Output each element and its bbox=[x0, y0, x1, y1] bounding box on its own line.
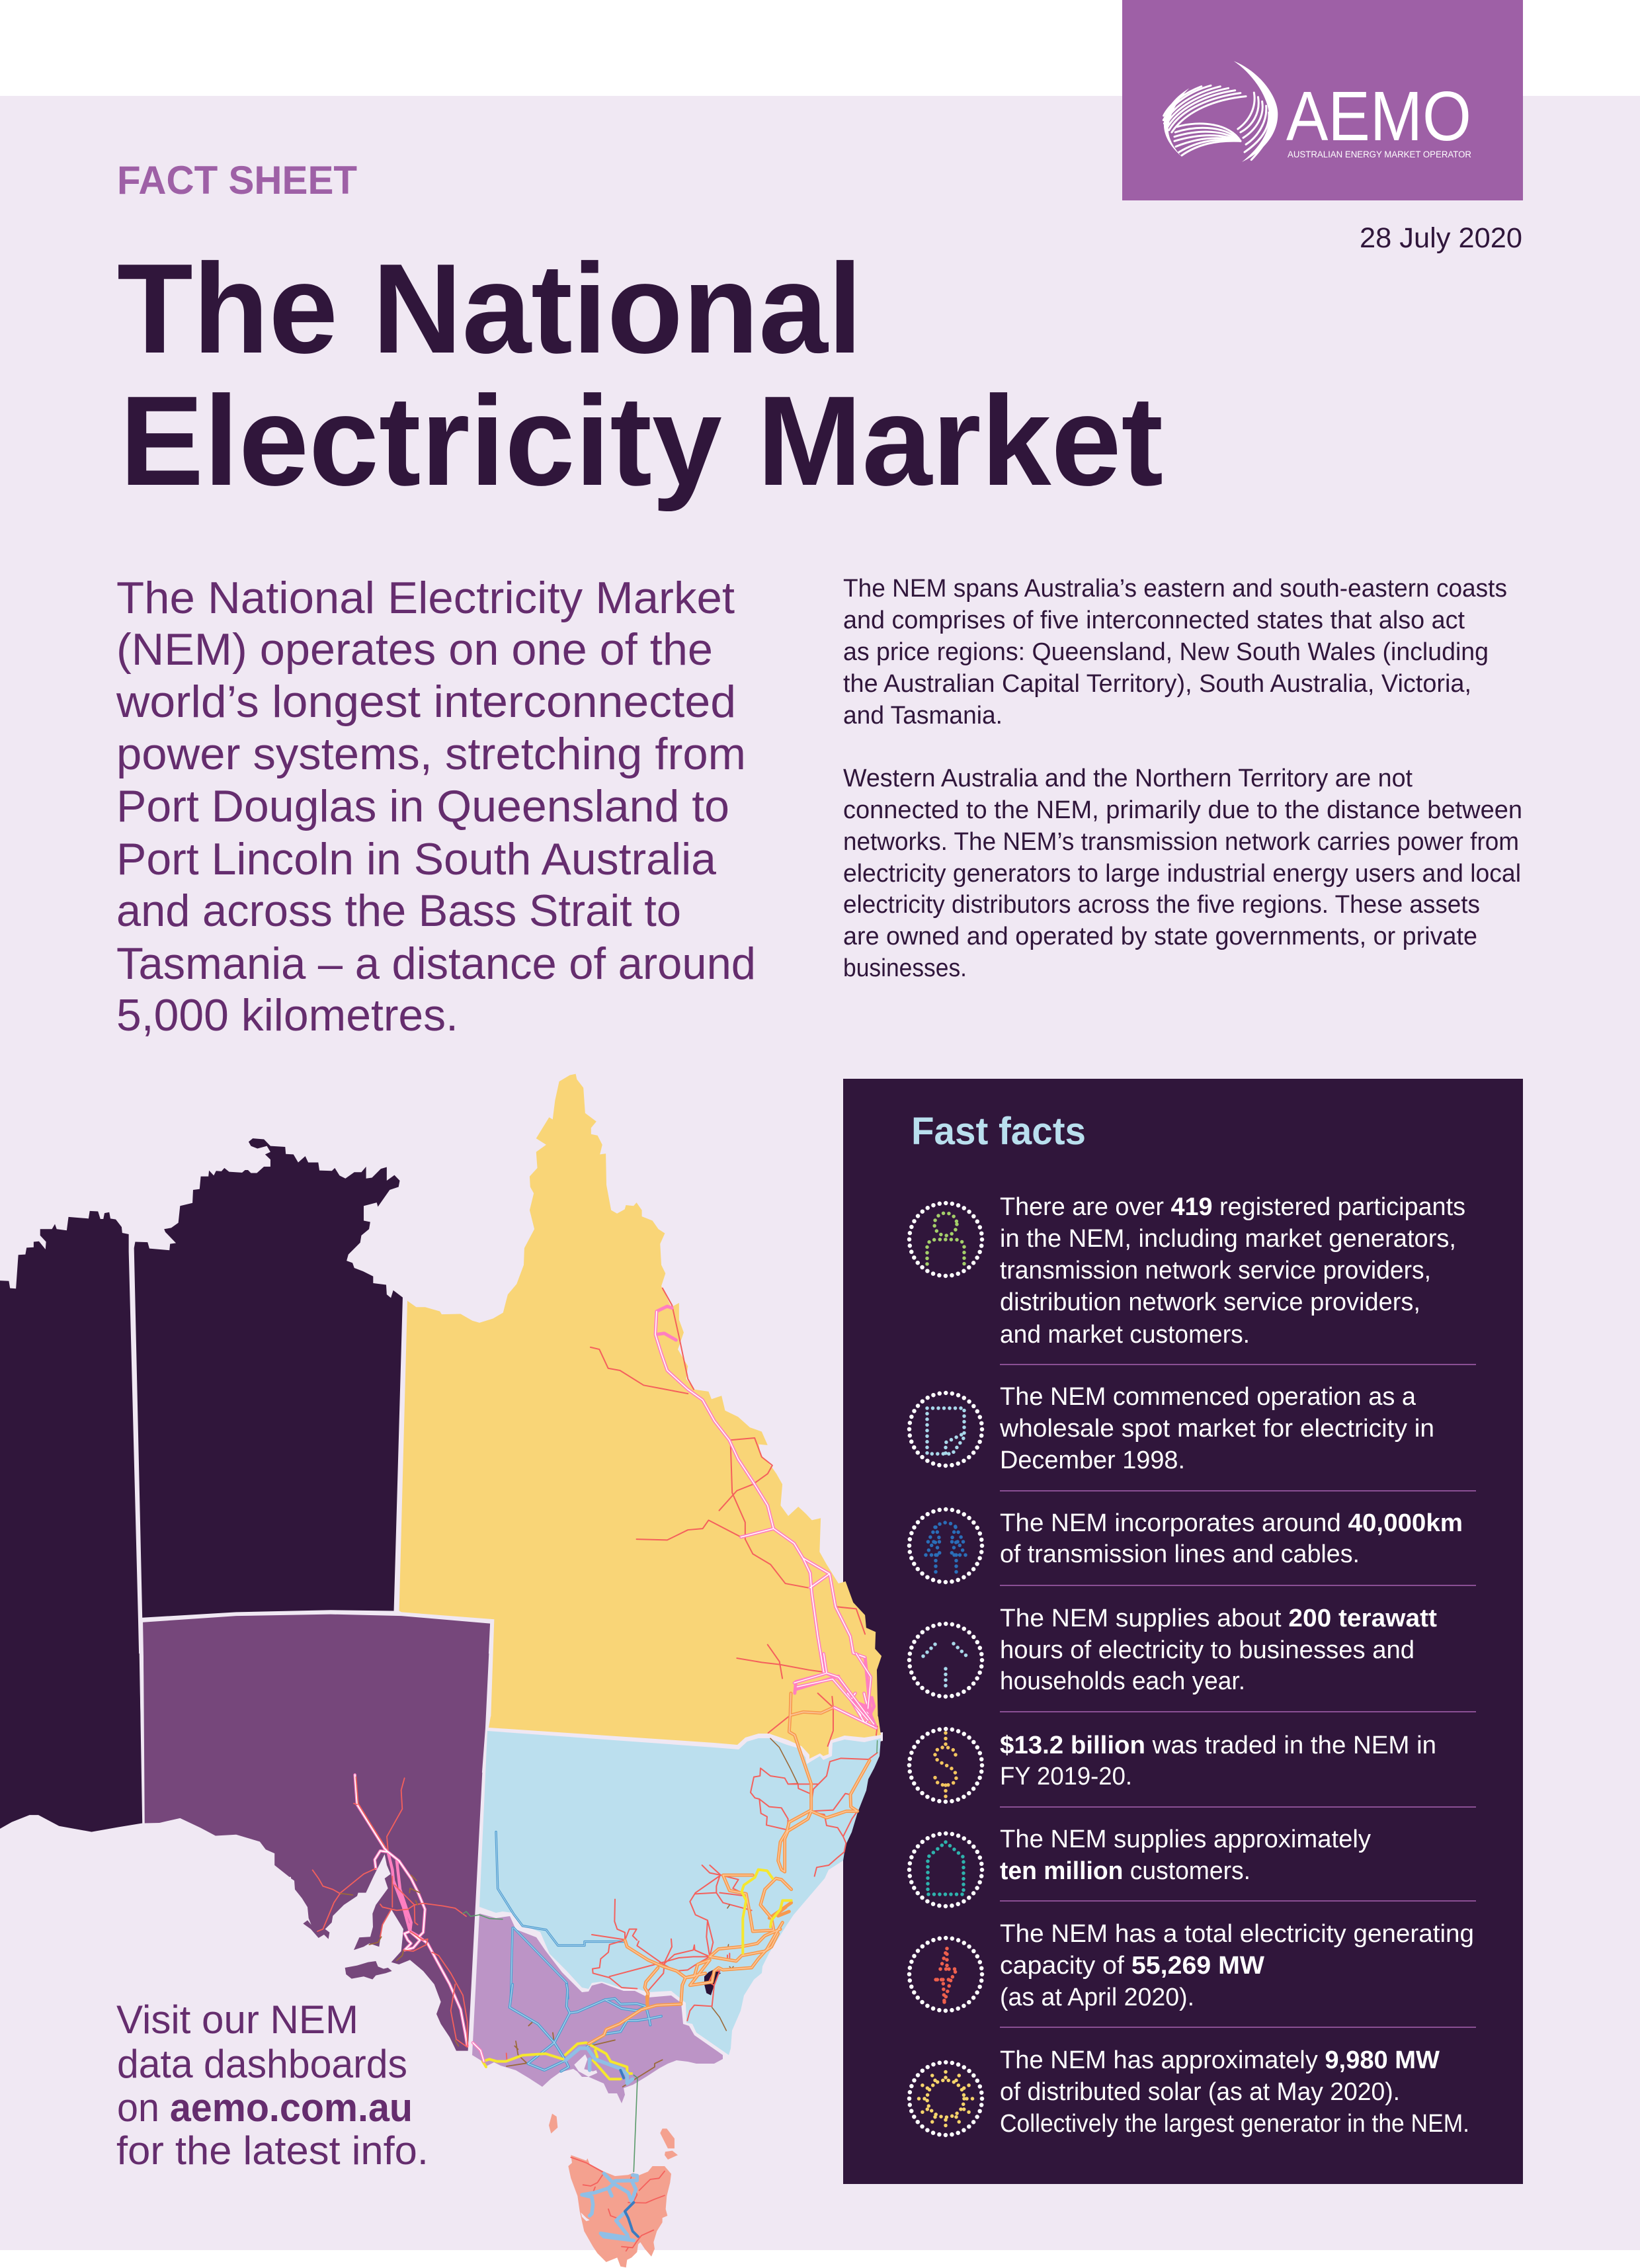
icon: dollar sign bbox=[909, 1729, 982, 1802]
icon: person bbox=[909, 1203, 982, 1276]
intro text: Port Lincoln in South Australia bbox=[116, 834, 716, 884]
Western Australia bbox=[0, 1211, 142, 1832]
title: Electricity Market bbox=[120, 369, 1163, 512]
intro text: 5,000 kilometres. bbox=[116, 990, 458, 1040]
call to action text: Visit our NEM bbox=[116, 1997, 358, 2042]
fact: distributed solar: Collectively the largest generator in the NEM. bbox=[1000, 2110, 1469, 2138]
fact: participants: transmission network service providers, bbox=[1000, 1257, 1431, 1284]
logo strapline: AUSTRALIAN ENERGY MARKET OPERATOR bbox=[1288, 149, 1471, 159]
fact: transmission lines: The NEM incorporates around 40,000km bbox=[1000, 1509, 1463, 1537]
body paragraphs: and Tasmania. bbox=[843, 702, 1003, 730]
date: 28 July 2020 bbox=[1360, 222, 1522, 254]
fact: commenced bbox=[999, 1383, 1434, 1474]
call to action text: on aemo.com.au bbox=[117, 2085, 413, 2130]
fact: customers: ten million customers. bbox=[1000, 1857, 1250, 1885]
body paragraphs: electricity distributors across the five regions. These assets bbox=[843, 891, 1480, 919]
body paragraphs bbox=[843, 575, 1522, 982]
fact: commenced: December 1998. bbox=[1000, 1447, 1185, 1474]
call to action text: for the latest info. bbox=[116, 2128, 429, 2173]
fact: capacity: capacity of 55,269 MW bbox=[1000, 1952, 1264, 1980]
icon: broken arrow bbox=[909, 1624, 982, 1697]
fact: terawatt hours: hours of electricity to businesses and bbox=[1000, 1636, 1414, 1664]
call to action text bbox=[116, 1997, 429, 2173]
fact: participants: There are over 419 registered participants bbox=[1000, 1193, 1465, 1221]
transmission lines: Queensland bbox=[591, 1288, 871, 1716]
border band over panel bbox=[829, 1732, 883, 1746]
panel: fast facts bbox=[843, 1079, 1523, 2184]
logo wordmark: AEMO bbox=[1286, 77, 1471, 155]
fact: customers: The NEM supplies approximately bbox=[1000, 1826, 1371, 1853]
fact: distributed solar: The NEM has approximately 9,980 MW bbox=[1000, 2046, 1440, 2074]
eyebrow: fact sheet: FACT SHEET bbox=[117, 158, 357, 202]
body paragraphs: networks. The NEM’s transmission network carries power from bbox=[843, 828, 1519, 856]
body paragraphs: and comprises of five interconnected states that also act bbox=[843, 607, 1465, 634]
intro text: Port Douglas in Queensland to bbox=[116, 781, 729, 831]
map of Australia bbox=[0, 1074, 883, 2267]
body paragraphs: as price regions: Queensland, New South Wales (including bbox=[843, 638, 1489, 666]
intro text: (NEM) operates on one of the bbox=[116, 624, 713, 675]
fact: terawatt hours: The NEM supplies about 200 terawatt bbox=[1000, 1605, 1437, 1632]
transmission lines: south Queensland and northern NSW bbox=[751, 1693, 878, 1876]
intro text: Tasmania – a distance of around bbox=[116, 939, 756, 989]
transmission lines: South Australia bbox=[313, 1775, 503, 2047]
logo block bbox=[1122, 0, 1523, 200]
logo swoosh icon bbox=[1163, 61, 1278, 162]
fact: distributed solar: of distributed solar (as at May 2020). bbox=[1000, 2078, 1400, 2106]
icon: lightning bolt bbox=[909, 1938, 982, 2011]
fact: transmission lines bbox=[1000, 1509, 1463, 1568]
body paragraphs: Western Australia and the Northern Territory are not bbox=[843, 765, 1413, 792]
icon: document bbox=[909, 1393, 982, 1466]
heading: fast facts: Fast facts bbox=[911, 1110, 1086, 1153]
fact: participants: and market customers. bbox=[1000, 1321, 1250, 1349]
fact: capacity bbox=[1000, 1920, 1474, 2011]
fact: capacity: (as at April 2020). bbox=[1000, 1984, 1194, 2011]
fact: commenced: The NEM commenced operation as a bbox=[1000, 1383, 1416, 1411]
body paragraphs: connected to the NEM, primarily due to the distance between bbox=[843, 796, 1522, 824]
intro text: world’s longest interconnected bbox=[116, 677, 736, 727]
icon: transmission towers bbox=[909, 1509, 982, 1582]
fact: traded: FY 2019-20. bbox=[1000, 1763, 1132, 1790]
title bbox=[117, 237, 1163, 512]
call to action text: data dashboards bbox=[117, 2042, 407, 2086]
fact: traded bbox=[1000, 1732, 1436, 1790]
body paragraphs: are owned and operated by state governments, or private bbox=[843, 923, 1477, 950]
fact: terawatt hours bbox=[1000, 1605, 1437, 1695]
intro text: and across the Bass Strait to bbox=[116, 886, 681, 936]
icon: house bbox=[909, 1833, 982, 1906]
South Australia bbox=[143, 1615, 490, 2051]
Queensland bbox=[399, 1074, 882, 1759]
Australian Capital Territory bbox=[704, 1969, 721, 1995]
New South Wales bbox=[479, 1731, 881, 2055]
intro text: The National Electricity Market bbox=[116, 573, 735, 623]
title: The National bbox=[117, 237, 862, 380]
fact: terawatt hours: households each year. bbox=[1000, 1667, 1245, 1695]
Tasmania bbox=[549, 2114, 678, 2267]
intro text bbox=[116, 573, 756, 1040]
fact: capacity: The NEM has a total electricity generating bbox=[1000, 1920, 1474, 1948]
fact: participants bbox=[1000, 1193, 1465, 1349]
body paragraphs: electricity generators to large industrial energy users and local bbox=[843, 860, 1521, 888]
fact: transmission lines: of transmission lines and cables. bbox=[1000, 1540, 1360, 1568]
fact: participants: distribution network service providers, bbox=[1000, 1288, 1420, 1316]
fact: customers bbox=[1000, 1826, 1371, 1885]
fact: participants: in the NEM, including market generators, bbox=[1000, 1225, 1456, 1253]
transmission lines: Queensland south fan and NSW-Victoria blue line bbox=[496, 1654, 876, 2000]
fact: distributed solar bbox=[1000, 2046, 1469, 2138]
Northern Territory bbox=[134, 1138, 403, 1618]
body paragraphs: The NEM spans Australia’s eastern and south-eastern coasts bbox=[843, 575, 1507, 603]
transmission lines: southern NSW bbox=[592, 1865, 792, 2031]
body paragraphs: the Australian Capital Territory), South Australia, Victoria, bbox=[843, 670, 1471, 698]
intro text: power systems, stretching from bbox=[116, 729, 746, 779]
fact: commenced: wholesale spot market for electricity in bbox=[999, 1415, 1434, 1443]
icon: sun bbox=[909, 2062, 982, 2135]
body paragraphs: businesses. bbox=[843, 954, 967, 982]
transmission lines: Victoria and Tasmania bbox=[473, 1984, 681, 2251]
Victoria bbox=[472, 1913, 723, 2103]
fact: traded: $13.2 billion was traded in the NEM in bbox=[1000, 1732, 1436, 1759]
